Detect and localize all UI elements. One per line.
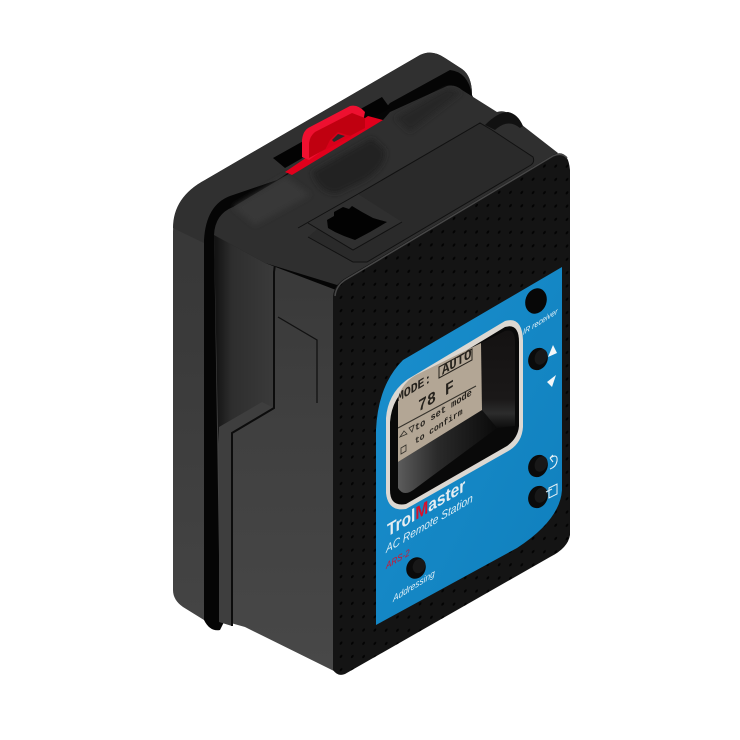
confirm icon	[546, 484, 557, 498]
corner highlight band	[233, 176, 310, 225]
blue control panel	[376, 267, 562, 625]
product name: AC Remote Station	[385, 491, 473, 557]
confirm button	[525, 483, 551, 511]
front face	[333, 153, 570, 675]
temperature: 78 F	[418, 378, 454, 418]
addressing label: Addressing	[392, 568, 435, 605]
confirm hint	[401, 445, 406, 454]
up arrow	[548, 345, 557, 357]
recess lines	[298, 194, 402, 250]
top right shoulder	[485, 112, 523, 130]
mode value box	[439, 349, 472, 378]
LCD screen	[398, 343, 482, 462]
display well	[390, 326, 519, 504]
brand name: TrolMaster	[387, 475, 465, 541]
instruction line one: to set mode	[415, 387, 472, 435]
LCD text	[397, 346, 476, 454]
IR label: IR receiver	[523, 306, 559, 337]
clip slot	[273, 97, 390, 168]
clip dark face	[309, 113, 365, 158]
clip bright side	[302, 106, 365, 160]
battery lid	[308, 123, 534, 262]
display bezel	[386, 320, 523, 509]
product illustration: TrolMaster AC Remote Station	[173, 52, 570, 675]
down arrow	[547, 375, 556, 387]
addressing button	[403, 554, 429, 582]
divider	[398, 386, 476, 428]
flange top surface	[173, 53, 472, 243]
model number: ARS-2	[385, 547, 410, 572]
side tab outline	[278, 317, 317, 403]
up/down button	[525, 345, 551, 373]
clip base plate	[285, 116, 383, 175]
well lower wall	[398, 410, 497, 493]
flange shadow patch	[395, 88, 462, 132]
device body left side	[214, 235, 336, 672]
speckle pattern	[333, 153, 570, 675]
clip hole	[325, 132, 352, 150]
device top face	[214, 86, 558, 285]
IR receiver	[522, 285, 550, 317]
back button	[525, 452, 551, 480]
clip shadow	[312, 138, 385, 193]
red clip	[285, 106, 383, 175]
lower step strip	[219, 402, 274, 626]
mode value: AUTO	[442, 346, 472, 380]
back icon	[550, 455, 557, 469]
clip hole shadow	[332, 134, 345, 142]
rear mounting flange	[173, 53, 480, 630]
mode line: MODE:	[397, 371, 431, 406]
arrow hints	[400, 425, 414, 437]
RJ jack recess	[298, 194, 402, 250]
instruction line two: to confirm	[415, 406, 463, 447]
side seam	[232, 237, 305, 626]
rear section of side	[214, 235, 274, 625]
top edge highlight	[335, 154, 567, 296]
RJ jack opening	[327, 206, 387, 240]
black gap behind flange	[204, 70, 480, 630]
well right wall	[481, 330, 515, 428]
